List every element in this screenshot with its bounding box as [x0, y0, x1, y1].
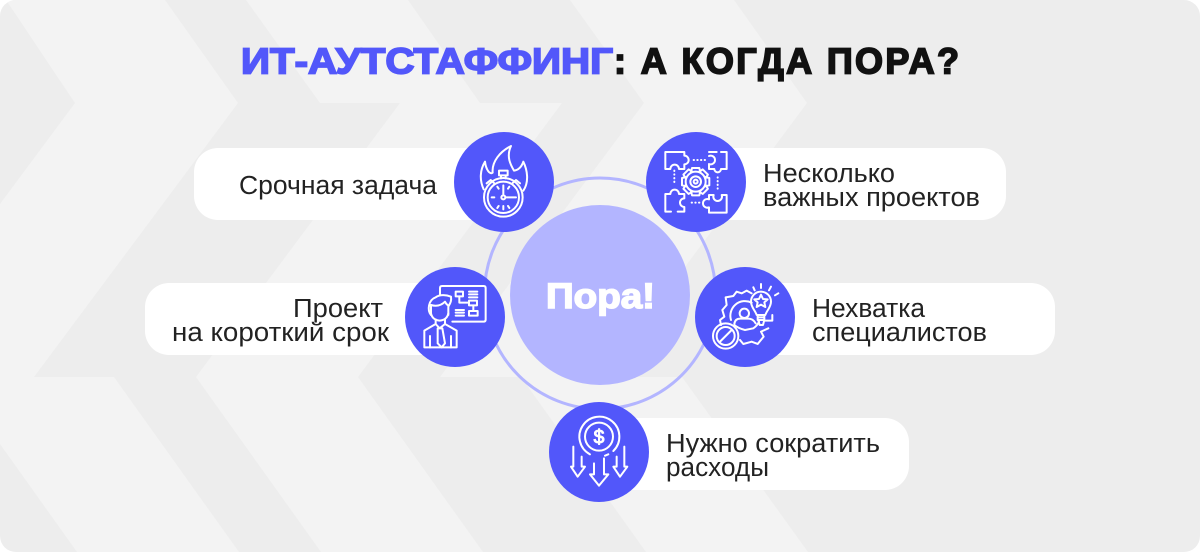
centre circle with label: Пора! [546, 277, 655, 316]
pill: short-term project: на короткий срок [172, 319, 390, 347]
ring around the centre [484, 178, 716, 409]
icon: coin with falling arrows: $ [594, 428, 605, 449]
pill: cut costs [589, 418, 909, 490]
pill: short-term project: Проект [293, 295, 383, 323]
item: lack of specialists [695, 267, 1055, 367]
item: several important projects [646, 132, 1006, 232]
title: ИТ-АУТСТАФФИНГ [241, 40, 613, 82]
pill: several projects: Несколько [763, 160, 895, 188]
title: : А КОГДА ПОРА? [614, 40, 959, 82]
pill: several projects [686, 148, 1006, 220]
centre circle with label [510, 205, 690, 385]
pill: urgent task: Срочная задача [239, 172, 438, 200]
pill: cut costs: расходы [666, 454, 769, 482]
pill: short-term project [145, 283, 465, 355]
pill: cut costs: Нужно сократить [666, 430, 880, 458]
item: urgent task [194, 132, 554, 232]
icon: puzzle and gear [646, 132, 746, 232]
icon: manager with board [405, 267, 505, 367]
pill: urgent task [194, 148, 514, 220]
title [241, 40, 959, 82]
icon: stopwatch on fire [454, 132, 554, 232]
pill: lack of specialists [735, 283, 1055, 355]
pill: lack of specialists: специалистов [812, 319, 987, 347]
item: cut costs [549, 402, 909, 502]
pill: lack of specialists: Нехватка [812, 295, 926, 323]
pill: several projects: важных проектов [763, 184, 980, 212]
icon: coin with falling arrows [549, 402, 649, 502]
item: short-term project [145, 267, 505, 367]
icon: gear, person, bulb and ban sign [695, 267, 795, 367]
